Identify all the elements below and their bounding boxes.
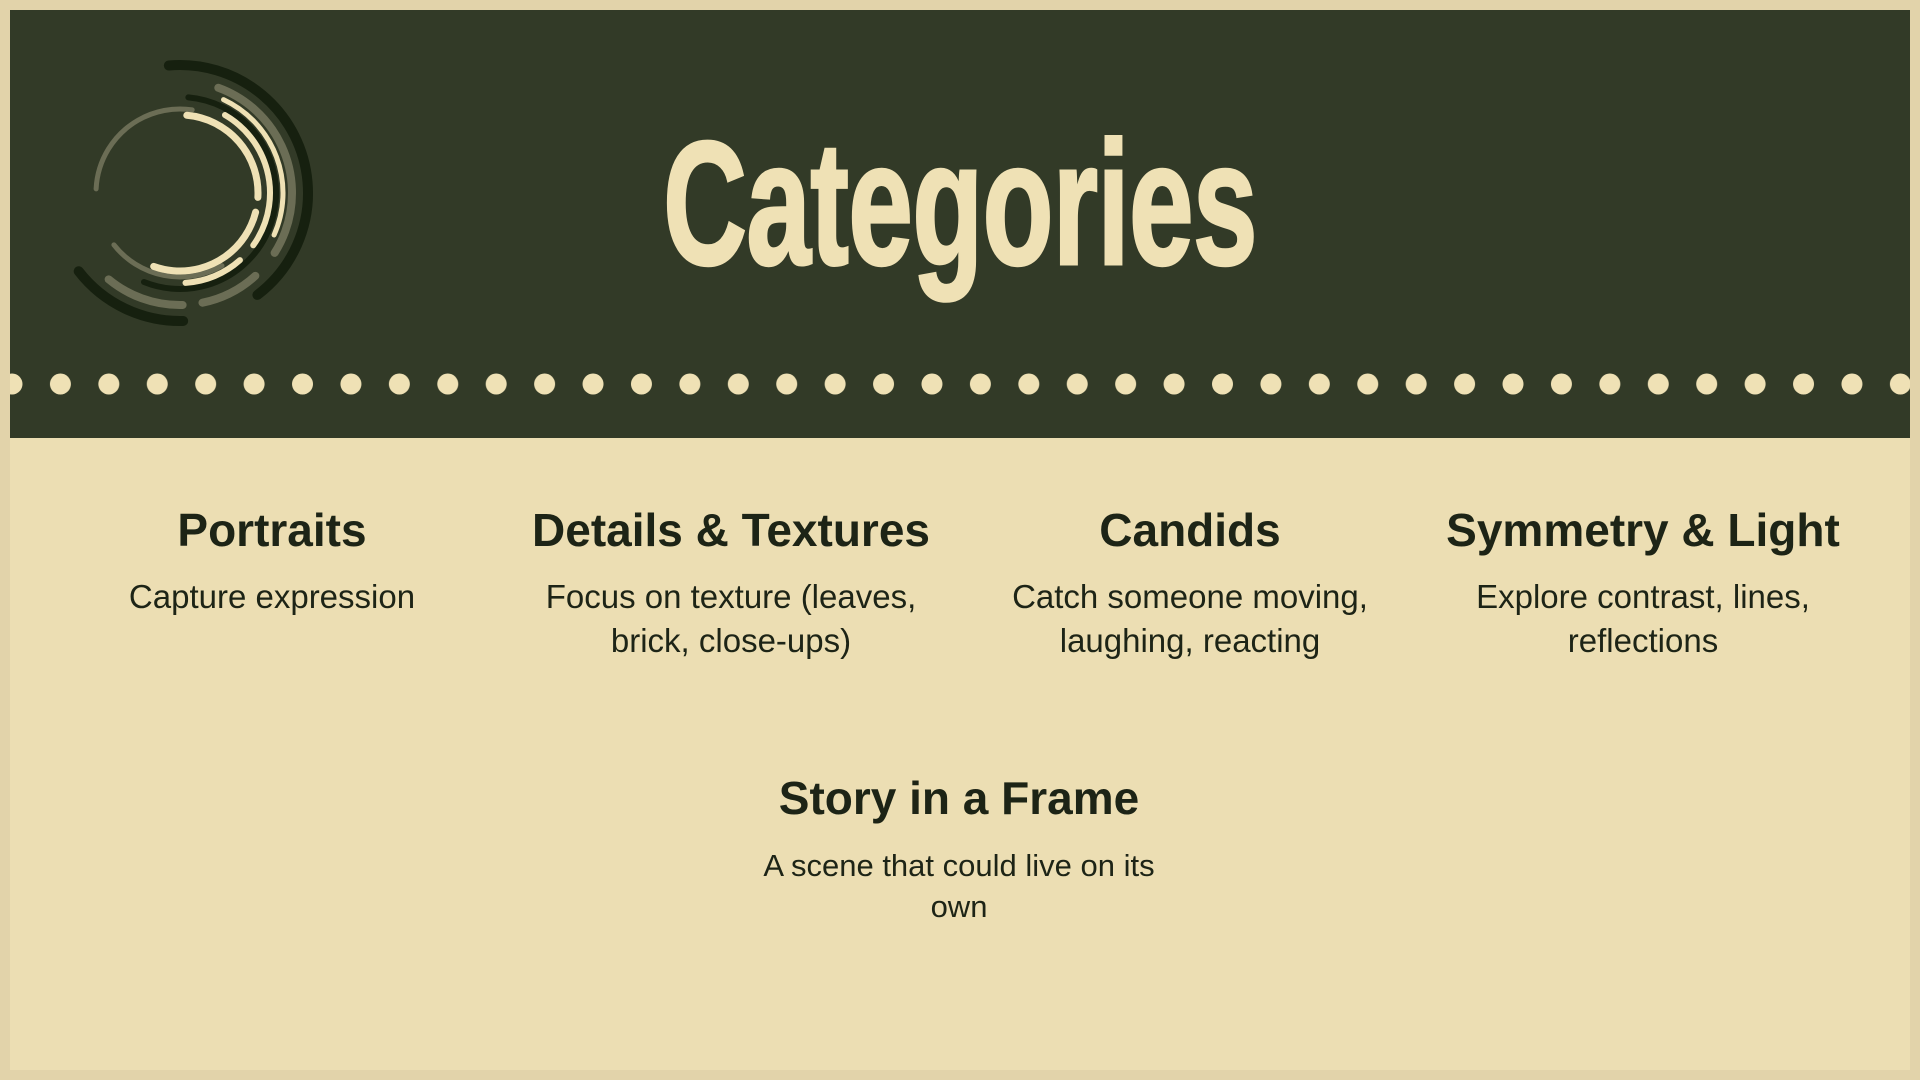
column: Candids: laughing, reacting (1060, 622, 1320, 659)
column: Details & Textures: brick, close-ups) (611, 622, 851, 659)
column: Story in a Frame: A scene that could live on its (763, 848, 1155, 883)
column: Story in a Frame: Story in a Frame (779, 772, 1139, 824)
column: Portraits (129, 504, 415, 615)
header band (10, 10, 1910, 438)
column: Symmetry & Light (1446, 504, 1840, 659)
column: Symmetry & Light: reflections (1568, 622, 1718, 659)
column: Story in a Frame (763, 772, 1155, 924)
title: Categories (663, 106, 1257, 302)
column: Portraits: Portraits (177, 504, 367, 556)
column: Symmetry & Light: Symmetry & Light (1446, 504, 1840, 556)
column: Symmetry & Light: Explore contrast, lines, (1476, 578, 1810, 615)
column: Candids: Catch someone moving, (1012, 578, 1368, 615)
column: Story in a Frame: own (931, 889, 987, 924)
column: Candids (1012, 504, 1368, 659)
column: Details & Textures (532, 504, 930, 659)
column: Details & Textures: Details & Textures (532, 504, 930, 556)
icon: concentric arcs logo (74, 60, 313, 326)
column: Candids: Candids (1099, 504, 1281, 556)
column: Portraits: Capture expression (129, 578, 415, 615)
column: Details & Textures: Focus on texture (leaves, (546, 578, 916, 615)
